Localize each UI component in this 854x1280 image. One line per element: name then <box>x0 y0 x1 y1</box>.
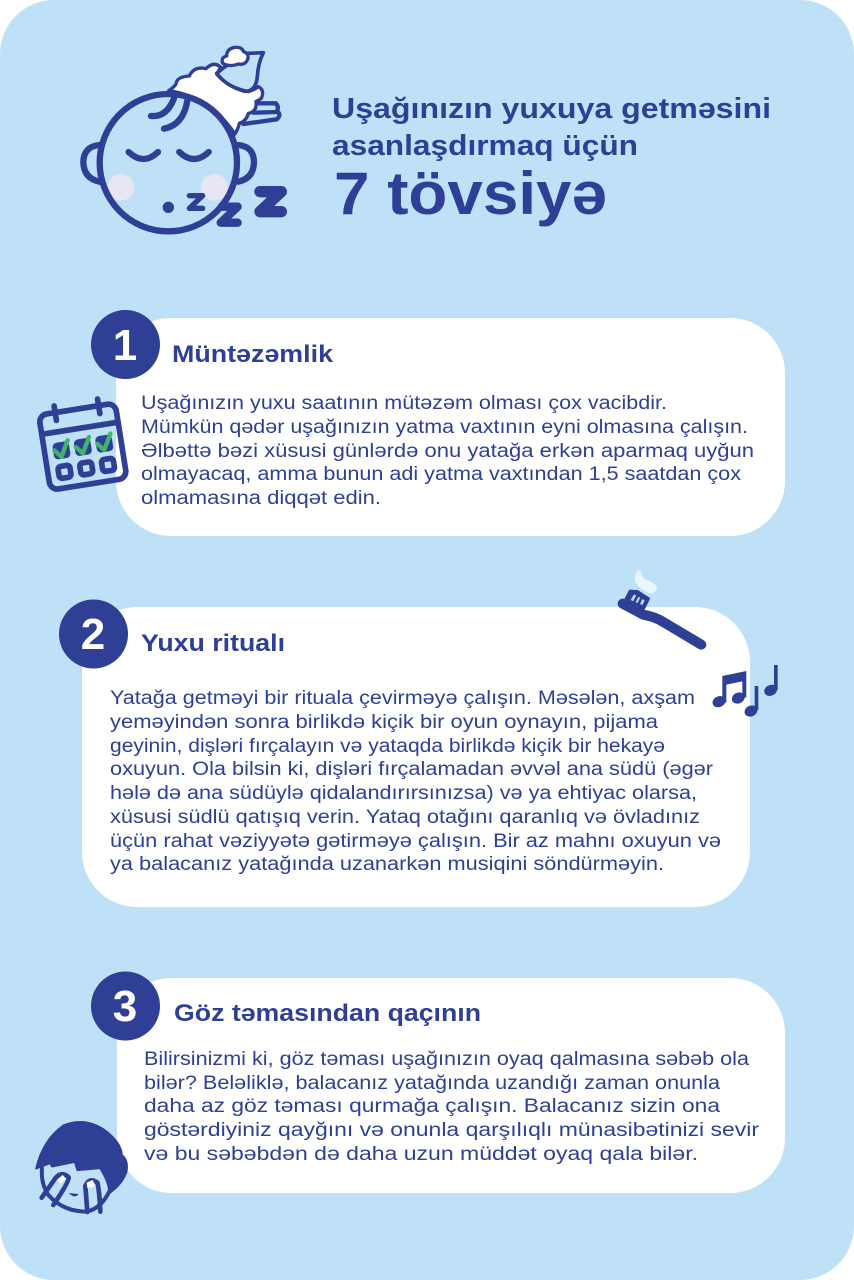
icon: ears <box>83 145 254 182</box>
text block <box>141 393 754 509</box>
icon: mouth <box>163 202 174 213</box>
icon: small z <box>189 196 203 208</box>
icon: calendar <box>38 396 127 490</box>
text block: və bu səbəbdən də daha uzun müddət oyaq qala bilər. <box>144 1144 698 1165</box>
text block: Bilirsinizmi ki, göz təması uşağınızın oyaq qalmasına səbəb ola <box>144 1049 749 1070</box>
bristles <box>631 594 645 605</box>
panel: tip 3 <box>36 972 785 1212</box>
hand right <box>85 1180 100 1212</box>
number badge 1: 1 <box>113 321 137 370</box>
icon: cheeks <box>108 174 228 201</box>
panel: tip 2 <box>59 570 779 907</box>
icon: child covering eyes <box>36 1122 127 1212</box>
eyes <box>57 1175 95 1188</box>
title: asanlaşdırmaq üçün <box>332 130 638 162</box>
heading: Göz təmasından qaçının <box>174 1000 481 1027</box>
heading: Yuxu ritualı <box>141 630 285 657</box>
text block: üçün rahat vəziyyətə gətirməyə çalışın. Bir az mahnı oxuyun və <box>110 831 721 852</box>
icon: closed eyes <box>129 152 209 159</box>
hand left <box>42 1174 69 1205</box>
panel: tip 1 <box>38 310 785 536</box>
number badge 2: 2 <box>81 610 105 659</box>
text block: geyinin, dişləri fırçalayın və yataqda birlikdə kiçik bir hekayə <box>110 736 665 757</box>
icon: head <box>100 94 237 231</box>
icon: hair curls <box>151 98 187 129</box>
text block: Uşağınızın yuxu saatının mütəzəm olması çox vacibdir. <box>141 393 667 414</box>
brush handle <box>623 604 701 645</box>
title: 7 tövsiyə <box>334 160 607 227</box>
text block <box>110 688 721 875</box>
brush head <box>625 591 649 609</box>
face fill <box>42 1167 110 1212</box>
text block: yeməyindən sonra birlikdə kiçik bir oyun oynayın, pijama <box>110 712 658 733</box>
title <box>332 93 771 227</box>
number badge 3: 3 <box>113 982 137 1031</box>
text block: Əlbəttə bəzi xüsusi günlərdə onu yatağa erkən aparmaq uyğun <box>141 441 754 462</box>
face outline <box>42 1168 110 1212</box>
heading: Müntəzəmlik <box>172 341 334 368</box>
text block: ya balacanız yatağında uzanarkən musiqini söndürməyin. <box>110 854 664 875</box>
icon: toothbrush <box>623 570 701 645</box>
number badge 1 <box>91 310 160 379</box>
text block: bilər? Beləliklə, balacanız yatağında uzandığı zaman onunla <box>144 1073 720 1094</box>
text block <box>144 1049 760 1165</box>
card <box>82 607 750 907</box>
hair <box>36 1122 127 1193</box>
icon: sheep <box>169 47 279 134</box>
toothpaste <box>635 570 657 593</box>
number badge 3 <box>91 972 160 1040</box>
card <box>117 978 785 1193</box>
text block: xüsusi südlü qatışıq verin. Yataq otağını qaranlıq və övladınız <box>110 807 700 828</box>
text block: göstərdiyiniz qayğını və onunla qarşılıqlı münasibətinizi sevir <box>144 1120 760 1141</box>
icon: sleeping baby with sheep <box>83 47 281 231</box>
text block: oxuyun. Ola bilsin ki, dişləri fırçalamadan əvvəl ana südü (əgər <box>110 759 714 780</box>
text block: hələ də ana südüylə qidalandırırsınızsa) və ya ehtiyac olarsa, <box>110 783 697 804</box>
card <box>116 318 785 536</box>
icon: music notes <box>711 665 779 719</box>
text block: daha az göz təması qurmağa çalışın. Balacanız sizin ona <box>144 1096 721 1117</box>
mouth <box>69 1193 79 1196</box>
number badge 2 <box>59 600 128 668</box>
icon: medium z <box>221 207 238 223</box>
title: Uşağınızın yuxuya getməsini <box>332 93 771 125</box>
text block: olmamasına diqqət edin. <box>141 488 381 509</box>
text block: Yatağa getməyi bir rituala çevirməyə çalışın. Məsələn, axşam <box>110 688 695 709</box>
icon: large z <box>260 192 281 212</box>
text block: Mümkün qədər uşağınızın yatma vaxtının eyni olmasına çalışın. <box>141 417 748 438</box>
text block: olmayacaq, amma bunun adi yatma vaxtından 1,5 saatdan çox <box>141 464 742 485</box>
